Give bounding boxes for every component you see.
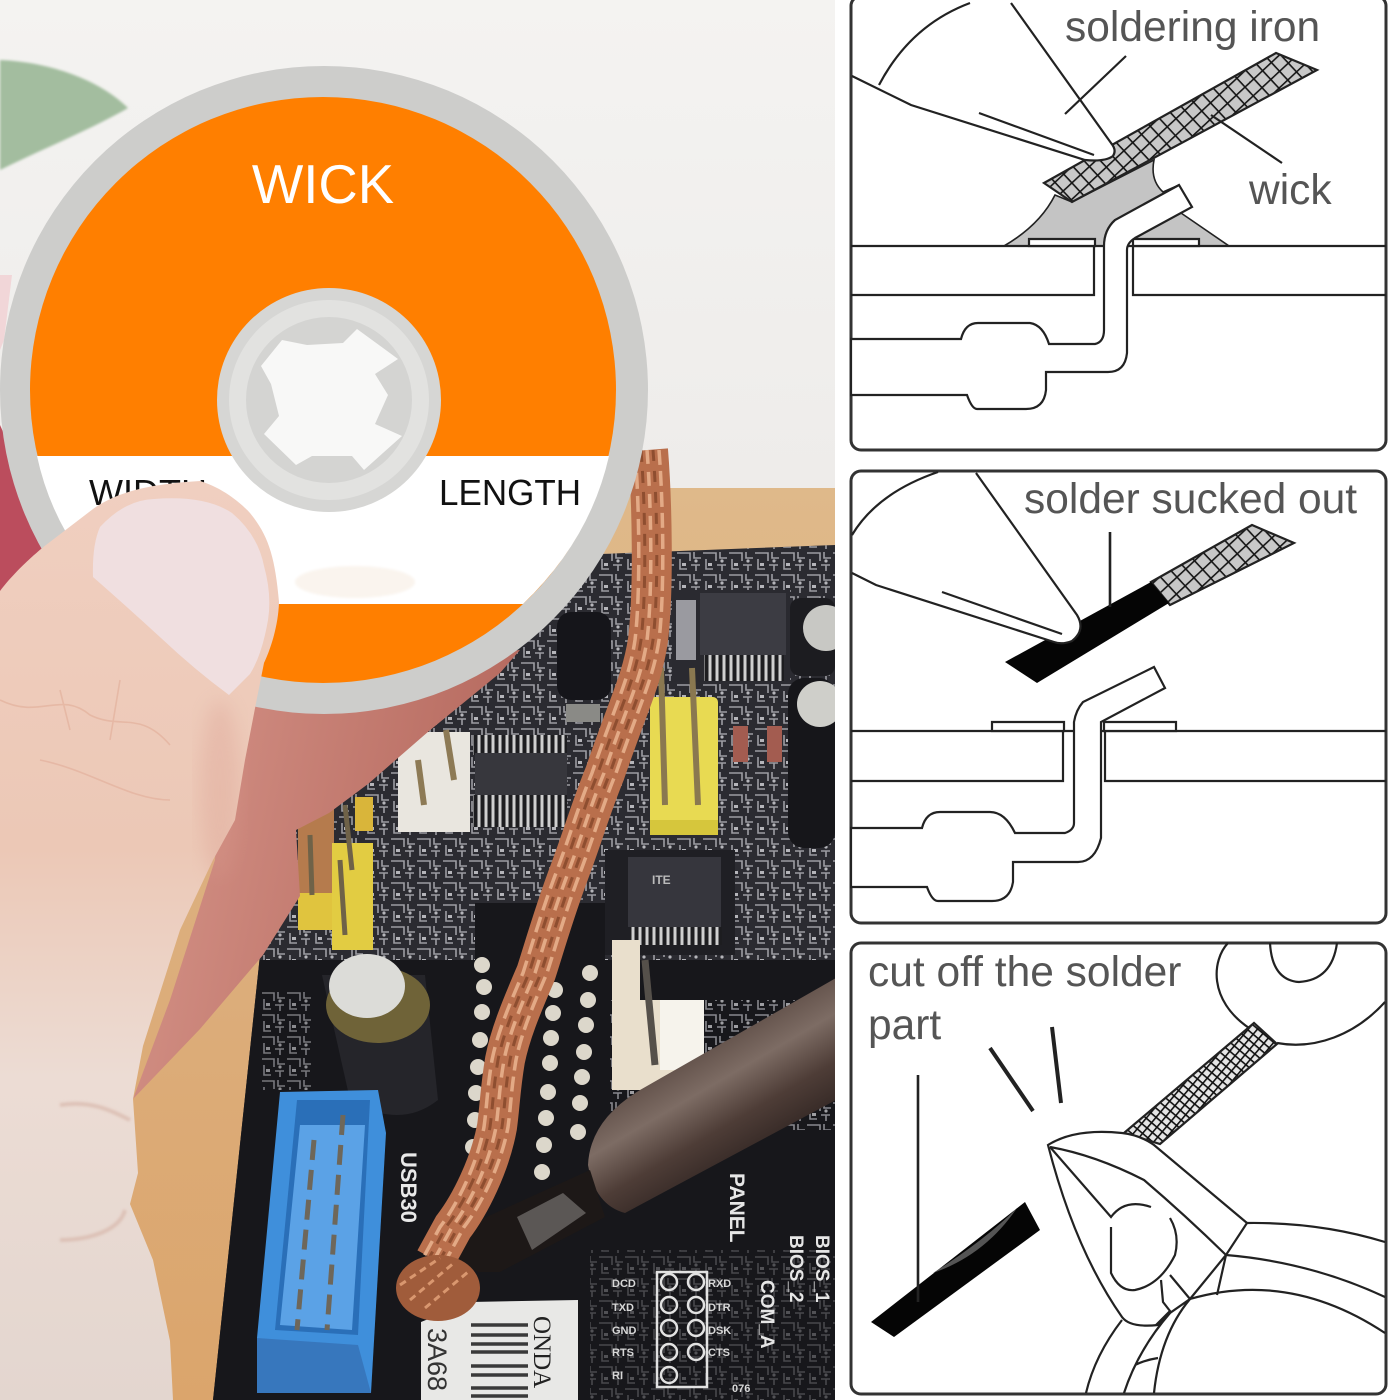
yellow header left [298, 797, 373, 950]
serial labels: DSK [708, 1325, 731, 1337]
barcode sticker [421, 1300, 578, 1400]
leader to wick [1211, 115, 1282, 163]
panel frame [851, 0, 1386, 450]
mesh wick [1124, 1023, 1277, 1144]
grey outer ring [0, 66, 648, 714]
panel 3: cut off the solder part [851, 943, 1386, 1394]
knuckle wrinkles [0, 680, 170, 800]
black cut wick [871, 1202, 1040, 1337]
board and lead pin [851, 185, 1386, 409]
label: solder sucked out: solder sucked out [1024, 476, 1357, 523]
serial labels: RI [612, 1370, 623, 1382]
serial labels: TXD [612, 1302, 634, 1314]
wall background [0, 0, 835, 490]
blue USB header [257, 1090, 386, 1393]
white connector [398, 730, 470, 832]
serial labels: CTS [708, 1347, 730, 1359]
pin header bottom [657, 1272, 707, 1387]
board label BIOS_1: BIOS_1 [811, 1235, 832, 1303]
main IC chip: ITE [652, 873, 671, 887]
board label USB30: USB30 [396, 1152, 421, 1223]
background finger behind spool [0, 275, 520, 1099]
circuit board [200, 540, 840, 1400]
solder blob [1004, 160, 1229, 246]
white label band [37, 456, 609, 604]
copper braid wick [396, 450, 663, 1321]
leader to cut wick [917, 1075, 919, 1302]
top IC chip [672, 590, 790, 682]
mesh wick [1044, 53, 1317, 202]
right column white backdrop [835, 0, 1400, 1400]
board and lead pin [851, 667, 1386, 901]
barcode sticker: ONDA [528, 1316, 555, 1388]
iron illustration [852, 3, 1115, 160]
wooden table [0, 488, 835, 1400]
wick spool [0, 66, 648, 714]
green leaf [0, 60, 128, 170]
heading WICK: WICK [252, 154, 394, 215]
serial labels: RTS [612, 1347, 634, 1359]
iron illustration [852, 472, 1081, 643]
thumbnail [93, 498, 269, 695]
label: soldering iron: soldering iron [1065, 4, 1320, 51]
capacitor top right [790, 598, 849, 676]
label: cut off the solder part: part [868, 1002, 941, 1049]
thumb and palm [0, 481, 279, 1400]
panel frame [851, 943, 1386, 1394]
black soaked wick [1005, 582, 1169, 683]
lower creases [60, 1104, 130, 1240]
smudge on label band [295, 566, 415, 598]
capacitor lower left [322, 954, 438, 1115]
label: cut off the solder part: cut off the solder [868, 949, 1181, 996]
panel frame [851, 471, 1386, 923]
serial labels: DCD [612, 1278, 636, 1290]
leader to soaked wick [1109, 532, 1111, 607]
transistor [557, 612, 611, 722]
diode pair [733, 726, 782, 762]
serial labels [612, 1278, 750, 1395]
board label BIOS_2: BIOS_2 [785, 1235, 806, 1303]
soldering iron [436, 978, 836, 1272]
leader to soldering iron [1065, 56, 1126, 114]
main IC chip [605, 850, 735, 955]
orange label [30, 97, 616, 683]
solder hole rows [463, 957, 598, 1181]
label WIDTH: WIDTH [89, 472, 207, 513]
label LENGTH: LENGTH [439, 472, 581, 513]
serial labels: 076 [732, 1383, 750, 1395]
yellow header right [650, 668, 718, 835]
serial labels: GND [612, 1325, 636, 1337]
spool hub [217, 288, 441, 512]
cut sparks [990, 1027, 1061, 1111]
serial labels: DTR [708, 1302, 731, 1314]
capacitor right [788, 678, 843, 848]
palm shading [200, 700, 240, 880]
panel 2: solder sucked out [851, 471, 1386, 923]
barcode sticker: 3A68 [422, 1328, 452, 1391]
mesh wick end [1151, 525, 1294, 605]
photo: desoldering wick on a circuit board [0, 0, 849, 1400]
board label PANEL: PANEL [725, 1173, 748, 1243]
spool outline [1217, 943, 1385, 1045]
cutting pliers [1048, 1132, 1385, 1393]
label: wick: wick [1248, 167, 1332, 214]
white connector lower [612, 940, 704, 1090]
panel 1: soldering iron and wick [851, 0, 1386, 450]
IC middle [473, 735, 567, 827]
serial labels: RXD [708, 1278, 731, 1290]
board label COM_A: COM_A [756, 1280, 777, 1349]
